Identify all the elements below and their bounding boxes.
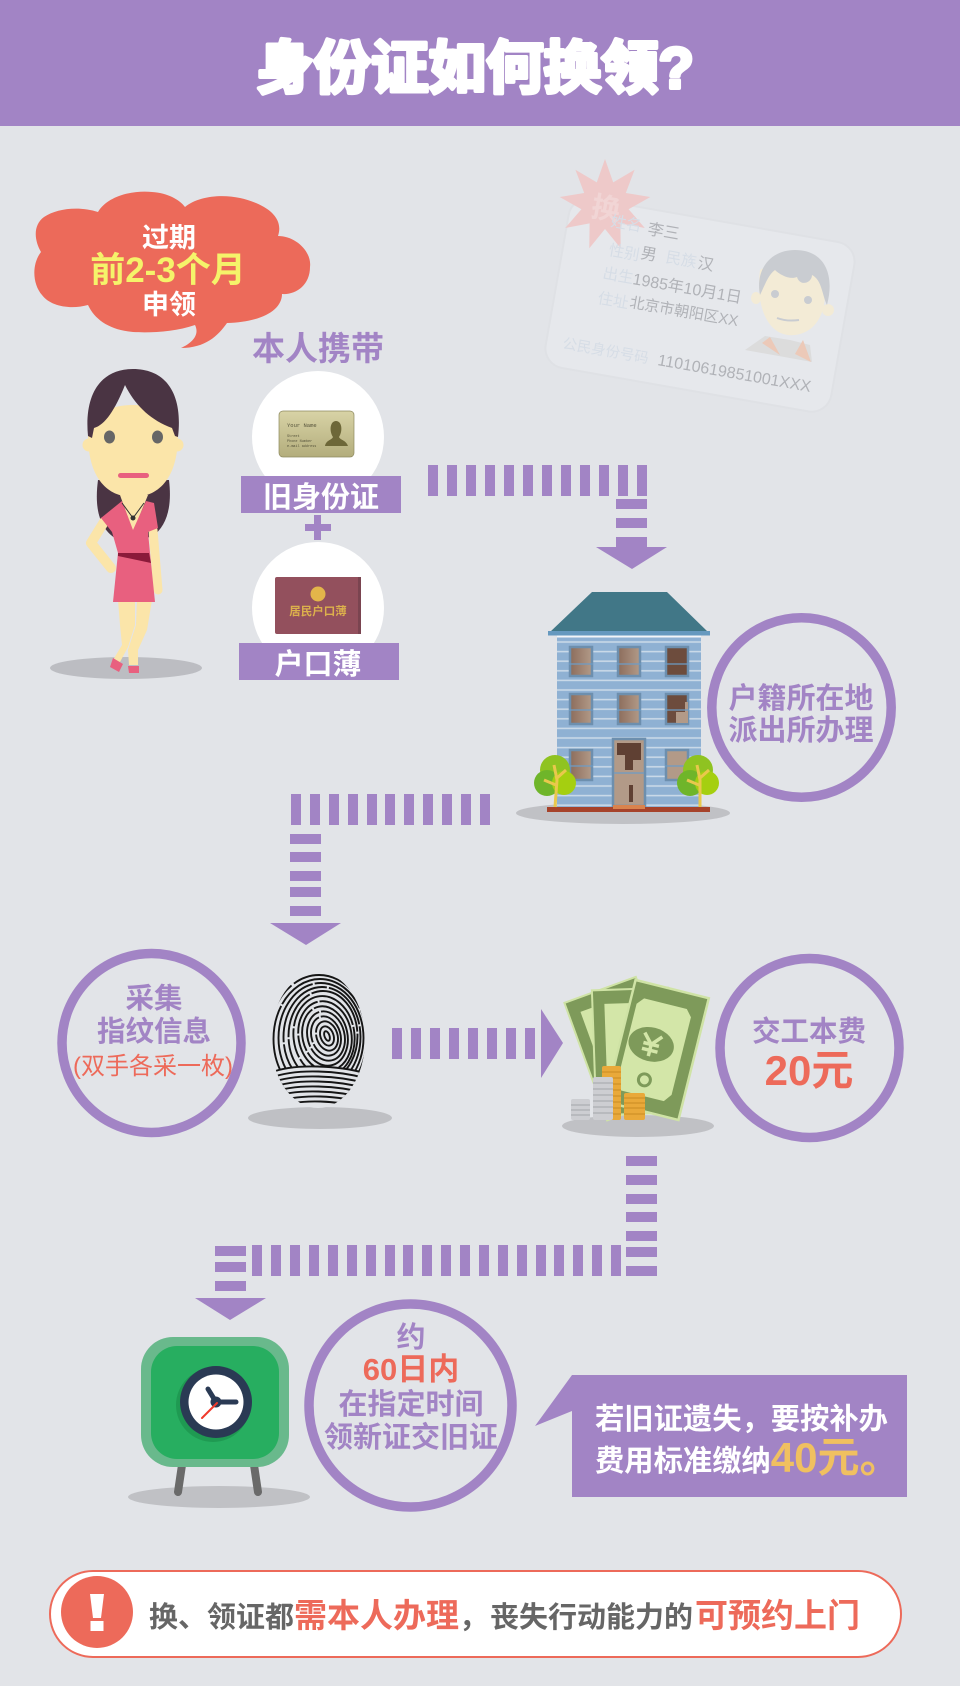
arrow: to clock xyxy=(195,1156,657,1320)
back banknote xyxy=(563,976,680,1122)
circle: collection time xyxy=(309,1304,512,1507)
arrow: to police station xyxy=(428,465,667,569)
coin stacks xyxy=(571,1066,645,1120)
faded ID card: 1985年10月1日 xyxy=(631,270,743,307)
notice bar: 换、领证都需本人办理，丧失行动能力的可预约上门 xyxy=(149,1597,860,1634)
arrow: to fee xyxy=(392,1009,563,1078)
callout: lost ID fee: 费用标准缴纳 xyxy=(595,1445,771,1478)
circle: collection time: 领新证交旧证 xyxy=(324,1421,498,1454)
speech bubble: renew 2-3 months before expiry: 申领 xyxy=(142,290,196,320)
faded ID card: 北京市朝阳区XX xyxy=(628,294,740,330)
speech bubble: renew 2-3 months before expiry: 过期 xyxy=(142,223,196,253)
callout: lost ID fee xyxy=(535,1375,907,1497)
label: household register xyxy=(239,643,399,681)
circle: fee: 交工本费 xyxy=(752,1016,866,1048)
icon: ID card: Street xyxy=(287,434,300,439)
faded ID card xyxy=(542,159,858,415)
icon: ID card: Phone Number xyxy=(287,439,312,444)
arrow: to fingerprint xyxy=(270,794,490,945)
front banknote xyxy=(604,978,710,1122)
middle banknote xyxy=(591,987,673,1116)
heading: bring in person: 本人携带 xyxy=(252,330,384,367)
faded ID card: 姓名 xyxy=(609,212,643,235)
circle: collection time: 在指定时间 xyxy=(338,1388,484,1421)
illustration: clock xyxy=(128,1337,310,1508)
icon: fingerprint xyxy=(248,975,392,1129)
callout: lost ID fee: 40元。 xyxy=(771,1434,902,1481)
header banner xyxy=(0,0,960,126)
icon: ID card: Your Name xyxy=(287,422,317,429)
tree left xyxy=(534,755,576,807)
circle: fingerprint collection: (双手各采一枚) xyxy=(73,1053,233,1080)
icon: household booklet: 居民户口薄 xyxy=(289,604,347,618)
circle: police station: 户籍所在地 xyxy=(728,682,874,715)
circle: fingerprint collection: 指纹信息 xyxy=(97,1016,211,1048)
notice bar xyxy=(50,1571,901,1657)
faded ID card: 11010619851001XXX xyxy=(656,352,813,396)
circle: fee xyxy=(720,958,899,1138)
faded ID card: 性别 xyxy=(607,241,641,264)
item: household register xyxy=(239,542,399,681)
icon: ID card: e-mail address xyxy=(287,444,316,449)
speech bubble: renew 2-3 months before expiry xyxy=(34,192,310,348)
label: household register: 户口薄 xyxy=(274,648,362,681)
label: old ID: 旧身份证 xyxy=(263,481,379,514)
item: old ID card xyxy=(241,371,401,514)
callout: lost ID fee: 若旧证遗失，要按补办 xyxy=(595,1403,888,1436)
tree right xyxy=(677,755,719,807)
faded ID card: 李三 xyxy=(646,220,681,243)
icon: household booklet xyxy=(275,577,361,634)
illustration: money and coins xyxy=(562,976,714,1137)
faded ID card: 男 xyxy=(639,245,658,265)
ID portrait xyxy=(745,250,834,362)
circle: police station: 派出所办理 xyxy=(728,714,874,747)
faded ID card: 出生 xyxy=(601,264,635,287)
faded ID card: 住址 xyxy=(596,289,630,312)
circle: collection time: 约 xyxy=(396,1321,426,1354)
circle: fingerprint collection xyxy=(62,954,241,1132)
label: old ID xyxy=(241,476,401,514)
plus sign xyxy=(305,515,331,540)
illustration: police station building xyxy=(516,592,730,824)
title: 身份证如何换领? xyxy=(256,37,694,101)
circle: collection time: 60日内 xyxy=(363,1352,459,1387)
circle: fee: 20元 xyxy=(765,1047,853,1094)
faded ID card: 民族 xyxy=(664,248,698,271)
faded ID card: 公民身份号码 xyxy=(561,335,650,367)
starburst badge: 换 xyxy=(589,190,623,228)
icon: exclamation mark xyxy=(61,1576,133,1648)
starburst badge xyxy=(560,159,650,248)
faded ID card: 汉 xyxy=(696,254,715,275)
illustration: woman xyxy=(50,369,202,679)
circle: fingerprint collection: 采集 xyxy=(125,983,183,1015)
circle: police station xyxy=(712,618,891,797)
speech bubble: renew 2-3 months before expiry: 前2-3个月 xyxy=(90,251,246,290)
icon: ID card xyxy=(279,411,354,457)
